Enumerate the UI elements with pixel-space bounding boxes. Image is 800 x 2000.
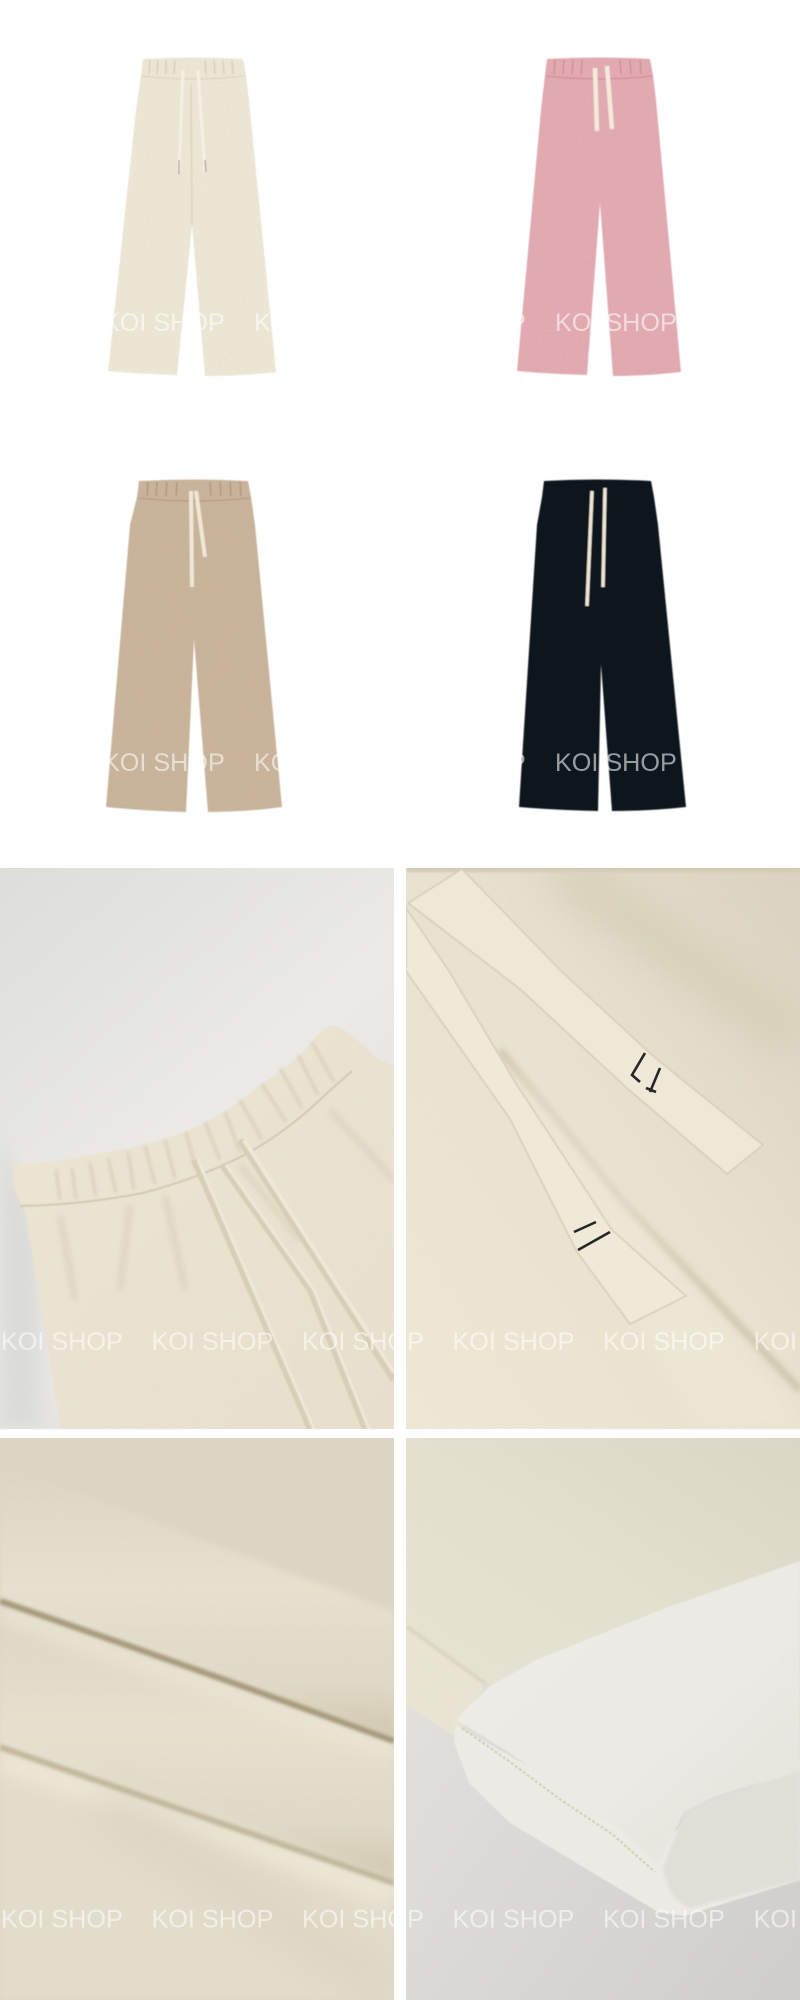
product photo: black pants <box>519 480 686 811</box>
watermark row: lower detail photos: KOI SHOP <box>152 1906 273 1934</box>
watermark row: lower product photos: KOI SHOP <box>103 749 225 777</box>
watermark row: upper product photos: KOI SHOP <box>555 309 677 337</box>
seam <box>462 1728 655 1872</box>
watermark row: lower detail photos <box>1 1906 800 1934</box>
product photo: cream pants <box>108 58 276 376</box>
detail photo: elastic waistband <box>0 868 394 1429</box>
product photo: taupe pants <box>106 480 282 812</box>
watermark row: upper product photos: KOI SHOP <box>404 309 526 337</box>
cuff outer lining <box>457 1561 800 1864</box>
watermark row: upper product photos: KOI SHOP <box>254 309 376 337</box>
watermark row: lower detail photos: KOI SHOP <box>302 1906 424 1934</box>
watermark row: upper detail photos: KOI SHOP <box>152 1328 273 1356</box>
detail photo: fleece lined cuff <box>406 1438 800 2000</box>
product photo: pink pants <box>517 58 681 376</box>
drawstring two <box>406 908 686 1324</box>
watermark row: lower detail photos: KOI SHOP <box>603 1906 725 1934</box>
watermark row: upper detail photos: KOI SHOP <box>302 1328 424 1356</box>
watermark row: lower product photos <box>103 749 677 777</box>
drawstring strands <box>194 1140 394 1429</box>
detail photo: drawstring ends <box>406 866 800 1429</box>
watermark row: upper product photos <box>103 309 677 337</box>
watermark row: upper detail photos: KOI SHOP <box>1 1328 123 1356</box>
watermark row: lower detail photos: KOI SHOP <box>1 1906 123 1934</box>
watermark row: upper detail photos: KOI SHOP <box>603 1328 725 1356</box>
lower pant leg <box>406 1627 485 1738</box>
watermark row: upper product photos: KOI SHOP <box>103 309 225 337</box>
watermark row: lower product photos: KOI SHOP <box>555 749 677 777</box>
watermark row: upper detail photos: KOI SHOP <box>452 1328 574 1356</box>
watermark row: lower product photos: KOI SHOP <box>254 749 376 777</box>
watermark row: upper detail photos <box>1 1328 800 1356</box>
cuff lower layer <box>454 1725 800 1916</box>
watermark row: lower detail photos: KOI SHOP <box>452 1906 574 1934</box>
stitch marks <box>632 1053 660 1092</box>
drawstring one <box>408 869 763 1174</box>
cuff opening <box>663 1770 800 1908</box>
watermark row: lower product photos: KOI SHOP <box>404 749 526 777</box>
detail photo: fleece folds <box>0 1438 394 2000</box>
